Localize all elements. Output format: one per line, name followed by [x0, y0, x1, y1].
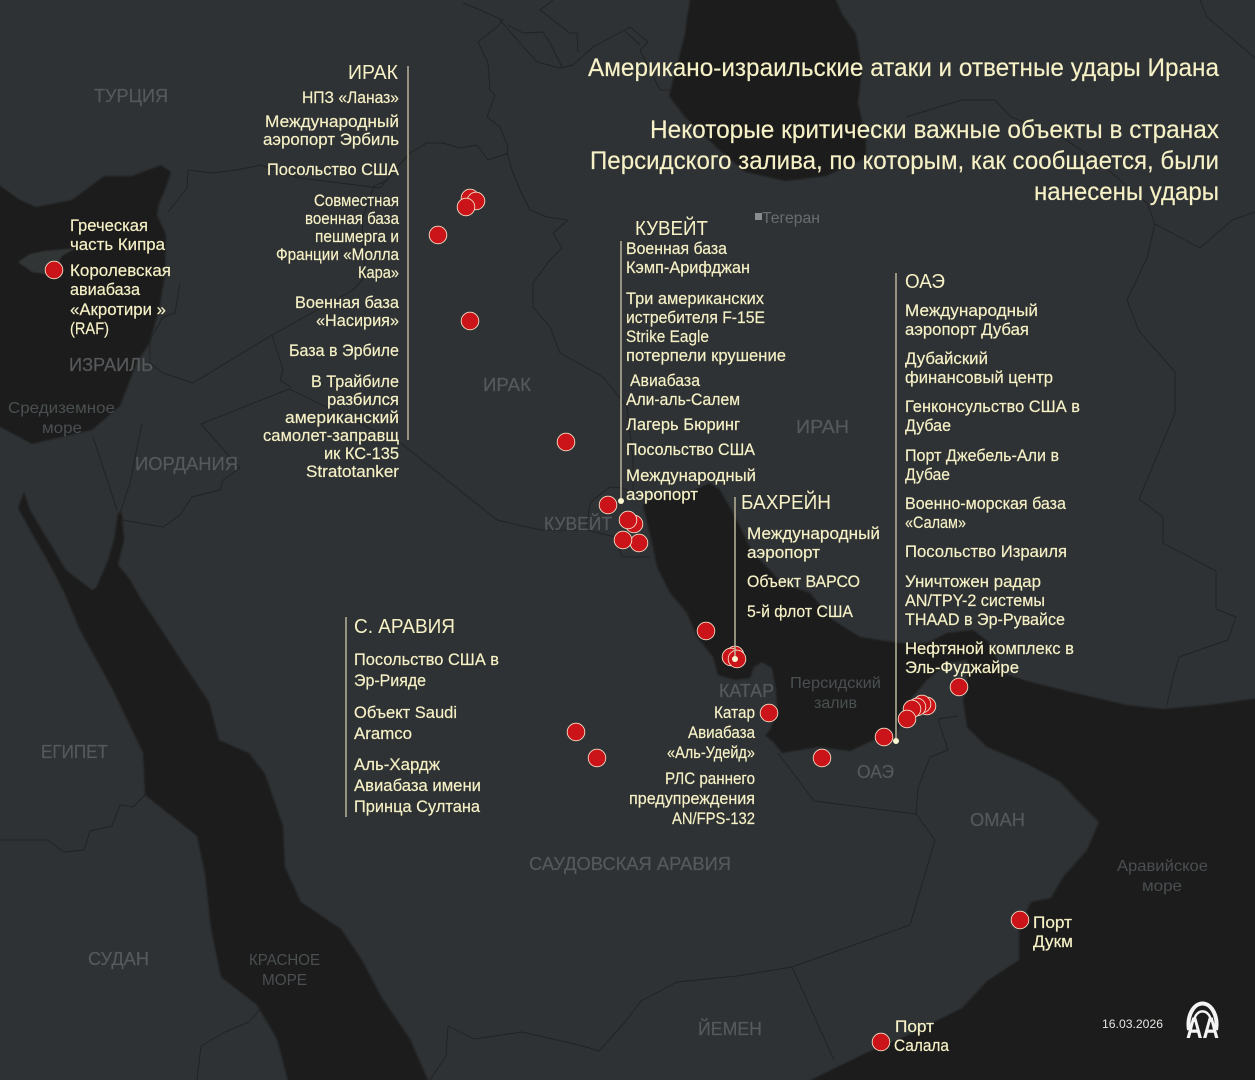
- panel: Qatar: РЛС раннего: [665, 769, 755, 788]
- panel: Kuwait: Лагерь Бюринг: [626, 415, 740, 434]
- panel: UAE: [893, 271, 1080, 744]
- panel: Cyprus: [70, 216, 171, 338]
- icon: AA logo: [1186, 1003, 1219, 1045]
- title: Американо-израильские атаки и ответные удары Ирана: [588, 54, 1219, 82]
- panel: UAE: Военно-морская база: [905, 494, 1067, 513]
- panel: Kuwait: Strike Eagle: [626, 327, 709, 346]
- panel: Qatar: «Аль-Удейд»: [667, 743, 755, 762]
- panel: Iraq: [263, 62, 408, 481]
- panel: Iraq: Stratotanker: [306, 462, 399, 481]
- map labels: countries and seas: Персидский: [790, 675, 881, 692]
- panel: Kuwait: аэропорт: [626, 485, 698, 504]
- panel: UAE: «Салам»: [905, 513, 966, 532]
- map labels: countries and seas: ЕГИПЕТ: [41, 742, 108, 762]
- panel: UAE: Нефтяной комплекс в: [905, 639, 1074, 658]
- map labels: countries and seas: ОАЭ: [857, 762, 894, 782]
- panel: Kuwait: Международный: [626, 466, 756, 485]
- panel: Iraq: Совместная: [314, 191, 399, 210]
- label: Port Duqm: Дукм: [1033, 932, 1073, 951]
- panel: Kuwait: Авиабаза: [630, 371, 701, 390]
- panel: UAE: Дубае: [905, 465, 950, 484]
- panel: Cyprus: Греческая: [70, 216, 148, 235]
- panel: Kuwait: КУВЕЙТ: [635, 216, 708, 240]
- panel: Iraq: Франции «Молла: [276, 245, 399, 264]
- panel: Kuwait: истребителя F-15E: [626, 308, 765, 327]
- title: Персидского залива, по которым, как сообщается, были: [590, 147, 1219, 175]
- strike markers: [45, 189, 1029, 1051]
- panel: Kuwait: потерпели крушение: [626, 346, 786, 365]
- map labels: countries and seas: ИЗРАИЛЬ: [69, 355, 153, 375]
- panel: Qatar: Катар: [714, 703, 755, 722]
- panel: Saudi Arabia: [346, 616, 499, 817]
- panel: Saudi Arabia: Aramco: [354, 724, 412, 743]
- map labels: countries and seas: ТУРЦИЯ: [94, 86, 168, 106]
- panel: UAE: AN/TPY-2 системы: [905, 591, 1045, 610]
- panel: UAE: Эль-Фуджайре: [905, 658, 1019, 677]
- panel: Kuwait: Три американских: [626, 289, 764, 308]
- title: [588, 54, 1219, 206]
- panel: Iraq: Военная база: [295, 293, 400, 312]
- panel: Saudi Arabia: Посольство США в: [354, 650, 499, 669]
- panel: UAE: Порт Джебель-Али в: [905, 446, 1059, 465]
- map labels: countries and seas: ЙЕМЕН: [698, 1018, 762, 1039]
- map labels: countries and seas: море: [42, 420, 82, 437]
- label: Port Salalah: [894, 1017, 949, 1055]
- map labels: countries and seas: МОРЕ: [262, 972, 307, 989]
- map labels: countries and seas: САУДОВСКАЯ АРАВИЯ: [529, 854, 731, 874]
- date: 16.03.2026: [1102, 1017, 1163, 1031]
- panel: Iraq: военная база: [305, 209, 399, 228]
- panel: Kuwait: Посольство США: [626, 440, 756, 459]
- panel: Iraq: В Трайбиле: [311, 372, 399, 391]
- title: нанесены удары: [1034, 178, 1219, 206]
- map labels: countries and seas: ИРАН: [796, 417, 849, 437]
- panel: UAE: Посольство Израиля: [905, 542, 1067, 561]
- panel: Kuwait: Военная база: [626, 239, 727, 258]
- panel: Iraq: разбился: [327, 390, 399, 409]
- panel: Bahrain: БАХРЕЙН: [741, 490, 831, 514]
- panel: UAE: Дубайский: [905, 349, 988, 368]
- panel: Bahrain: Объект ВАРСО: [747, 572, 860, 591]
- panel: Iraq: «Насирия»: [316, 311, 399, 330]
- city label: Tehran: Тегеран: [762, 210, 820, 227]
- panel: Cyprus: часть Кипра: [70, 235, 166, 254]
- map labels: countries and seas: ИОРДАНИЯ: [135, 454, 238, 474]
- panel: UAE: Генконсульство США в: [905, 397, 1080, 416]
- panel: UAE: финансовый центр: [905, 368, 1053, 387]
- panel: UAE: Дубае: [905, 416, 951, 435]
- panel: UAE: ОАЭ: [905, 271, 945, 293]
- panel: Bahrain: Международный: [747, 524, 880, 543]
- panel: Iraq: американский: [285, 408, 399, 427]
- panel: Saudi Arabia: Объект Saudi: [354, 703, 457, 722]
- panel: Saudi Arabia: С. АРАВИЯ: [354, 616, 455, 638]
- label: Port Duqm: [1033, 913, 1073, 951]
- panel: Cyprus: Королевская: [70, 261, 171, 280]
- icon: AA logo: AA: [1186, 1012, 1219, 1045]
- panel: Cyprus: авиабаза: [70, 280, 141, 299]
- panel: Bahrain: [732, 490, 880, 662]
- panel: Iraq: аэропорт Эрбиль: [263, 130, 399, 149]
- panel: UAE: Международный: [905, 301, 1038, 320]
- map labels: countries and seas: Аравийское: [1117, 858, 1208, 875]
- panel: Qatar: [629, 703, 755, 828]
- panel: Saudi Arabia: Принца Султана: [354, 797, 481, 816]
- panel: Qatar: предупреждения: [629, 789, 755, 808]
- panel: UAE: Уничтожен радар: [905, 572, 1041, 591]
- map labels: countries and seas: КРАСНОЕ: [249, 952, 320, 969]
- map labels: countries and seas: КАТАР: [719, 681, 774, 701]
- panel: UAE: THAAD в Эр-Рувайсе: [905, 610, 1065, 629]
- panel: Cyprus: «Акротири »: [70, 300, 166, 319]
- panel: Kuwait: Кэмп-Арифджан: [626, 258, 750, 277]
- map labels: countries and seas: ОМАН: [970, 810, 1025, 830]
- panel: Iraq: НПЗ «Ланаз»: [302, 88, 399, 107]
- panel: Iraq: Международный: [265, 112, 399, 131]
- panel: Kuwait: [618, 216, 786, 504]
- panel: Cyprus: (RAF): [70, 319, 109, 338]
- sea: Persian Gulf, Gulf of Oman and Arabian Sea: [643, 483, 1255, 1080]
- panel: Iraq: База в Эрбиле: [289, 341, 399, 360]
- sea: Mediterranean: [0, 165, 171, 444]
- map labels: countries and seas: море: [1142, 878, 1182, 895]
- sea: Caspian: [669, 0, 866, 181]
- title: Некоторые критически важные объекты в странах: [650, 116, 1219, 144]
- sea: Red Sea: [18, 492, 430, 1080]
- panel: Bahrain: аэропорт: [747, 543, 820, 562]
- panel: Qatar: AN/FPS-132: [672, 809, 755, 828]
- panel: Bahrain: 5-й флот США: [747, 602, 854, 621]
- panel: Saudi Arabia: Аль-Хардж: [354, 755, 441, 774]
- panel: Qatar: Авиабаза: [688, 723, 755, 742]
- map labels: countries and seas: залив: [814, 695, 857, 712]
- map labels: countries and seas: ИРАК: [483, 375, 532, 395]
- label: Port Salalah: Салала: [894, 1036, 949, 1055]
- panel: Iraq: самолет-заправщ: [263, 426, 399, 445]
- map labels: countries and seas: Средиземное: [8, 400, 115, 417]
- panel: Iraq: Кара»: [358, 263, 399, 282]
- panel: Saudi Arabia: Эр-Рияде: [354, 671, 426, 690]
- label: Port Salalah: Порт: [895, 1017, 934, 1036]
- panel: Iraq: пешмерга и: [315, 227, 399, 246]
- label: Port Duqm: Порт: [1033, 913, 1072, 932]
- map labels: countries and seas: СУДАН: [88, 949, 149, 969]
- panel: Saudi Arabia: Авиабаза имени: [354, 776, 481, 795]
- panel: UAE: аэропорт Дубая: [905, 320, 1029, 339]
- panel: Iraq: ик КС-135: [324, 444, 399, 463]
- panel: Iraq: Посольство США: [267, 160, 400, 179]
- map labels: countries and seas: КУВЕЙТ: [544, 513, 612, 534]
- island: Cyprus: [18, 248, 76, 275]
- panel: Iraq: ИРАК: [348, 62, 398, 84]
- panel: Kuwait: Али-аль-Салем: [626, 390, 740, 409]
